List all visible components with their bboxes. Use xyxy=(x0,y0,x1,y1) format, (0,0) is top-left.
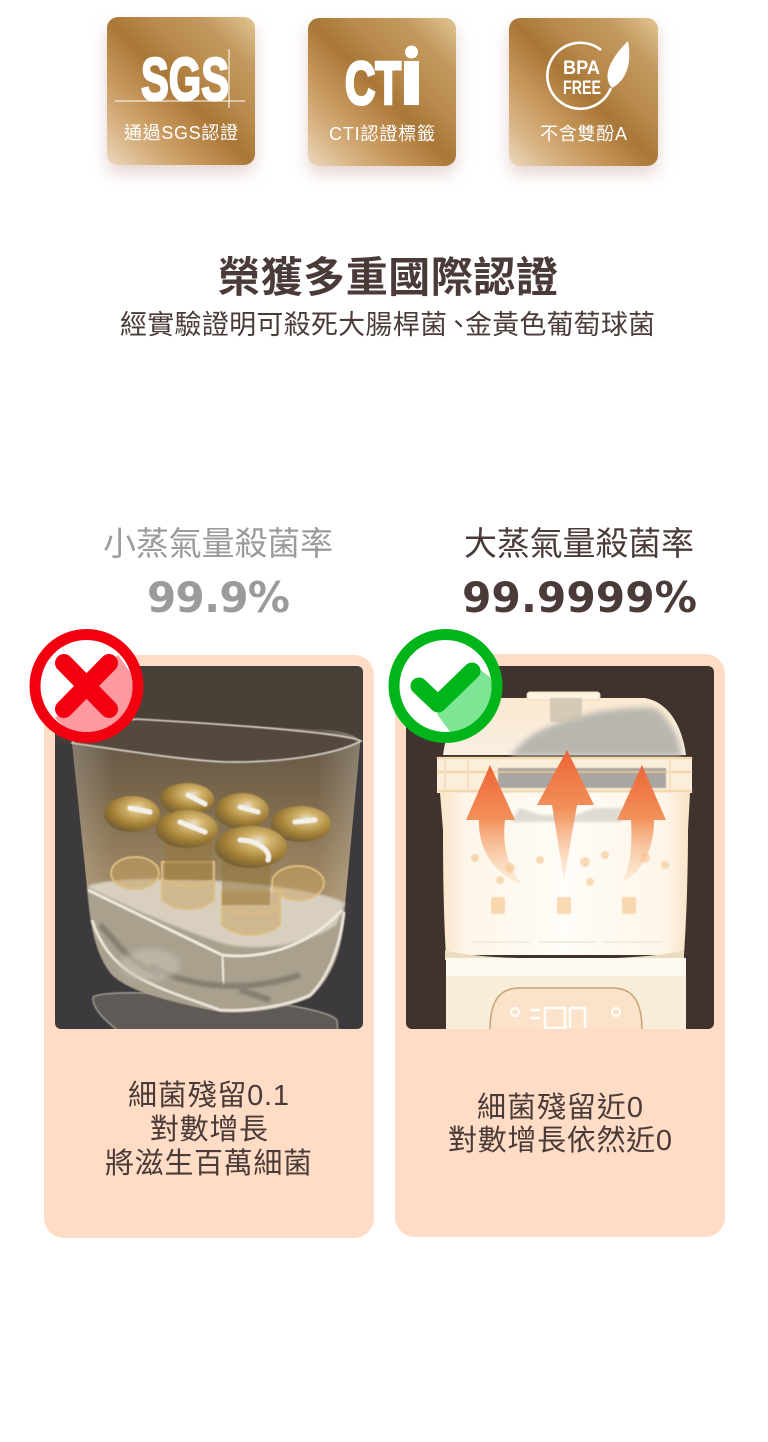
large steam heading: 大蒸氣量殺菌率 xyxy=(464,525,694,562)
subtitle: 、 xyxy=(445,310,472,340)
badge: CTI: CT xyxy=(345,50,401,117)
label text: 細菌殘留0.1 xyxy=(128,1079,289,1112)
badge: SGS: SGS xyxy=(141,46,229,113)
badge: BPA free: BPA xyxy=(563,58,600,79)
label text xyxy=(448,1091,672,1157)
subtitle xyxy=(120,310,655,340)
badge: BPA free xyxy=(509,18,658,166)
subtitle: 金黃色葡萄球菌 xyxy=(465,310,655,340)
small steam rate: 99.9% xyxy=(147,573,290,622)
badge: CTI: CTI認證標籤 xyxy=(329,123,435,144)
large steam rate: 99.9999% xyxy=(462,573,697,622)
panel: large steam xyxy=(395,654,725,1237)
arrow: left steam xyxy=(466,765,523,885)
infographic xyxy=(30,17,725,1238)
arrow: middle steam xyxy=(537,750,594,880)
photo: sterilizer with large steam xyxy=(406,666,714,1033)
label text: 將滋生百萬細菌 xyxy=(105,1147,312,1180)
badge: BPA free: 不含雙酚A xyxy=(540,124,627,144)
subtitle: 經實驗證明可殺死大腸桿菌 xyxy=(120,310,447,340)
badge: CTI xyxy=(308,18,456,166)
arrow: right steam xyxy=(617,765,666,882)
label text: 對數增長依然近0 xyxy=(448,1124,672,1157)
label text: 細菌殘留近0 xyxy=(477,1091,643,1124)
badge: BPA free: FREE xyxy=(563,78,601,99)
panel: small steam xyxy=(44,655,374,1238)
photo: sterilizer with small steam xyxy=(55,666,363,1032)
icon: green check xyxy=(388,629,502,743)
small steam heading: 小蒸氣量殺菌率 xyxy=(103,525,333,562)
icon: red cross xyxy=(35,634,150,760)
title: 榮獲多重國際認證 xyxy=(218,254,558,301)
label text: 對數增長 xyxy=(150,1113,268,1146)
badge: SGS xyxy=(107,17,255,165)
label text xyxy=(105,1079,312,1180)
badge: SGS: 通過SGS認證 xyxy=(124,123,238,143)
certification badges xyxy=(107,17,658,166)
